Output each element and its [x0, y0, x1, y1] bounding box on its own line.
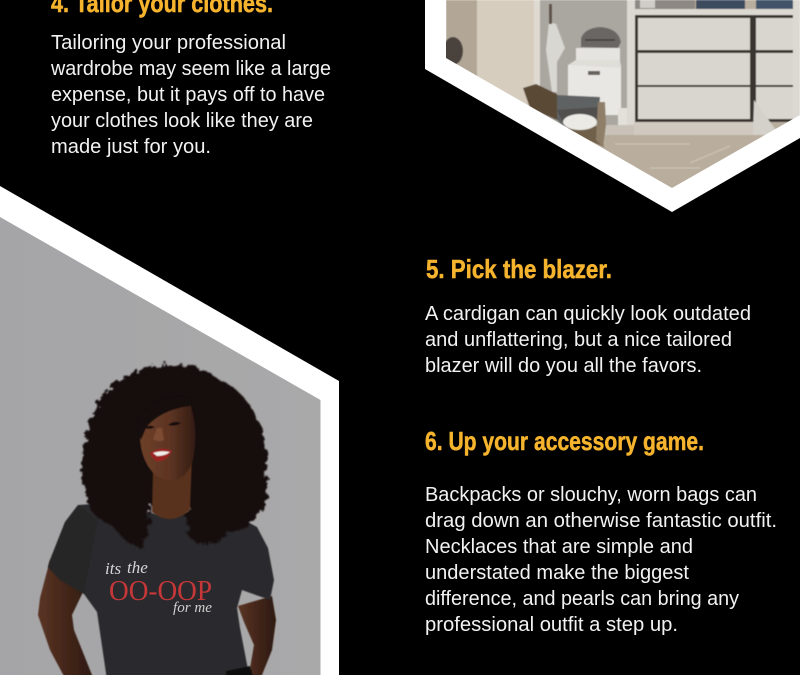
frame — [627, 0, 635, 135]
leaning panel — [753, 100, 776, 138]
text block: tip 5 — [425, 303, 751, 377]
hair — [82, 364, 268, 546]
text block: tip 4: your clothes look like they are — [51, 110, 313, 132]
face — [140, 405, 196, 478]
nose — [153, 428, 164, 441]
print: OO-OOP: OO-OOP — [109, 575, 212, 607]
text block: tip 6: understated make the biggest — [425, 562, 689, 584]
text block: tip 6: difference, and pearls can bring any — [425, 588, 739, 610]
text block: tip 4 — [50, 32, 331, 158]
lips — [150, 449, 172, 461]
text block: tip 6: Backpacks or slouchy, worn bags can — [425, 484, 757, 506]
wicker item — [446, 36, 464, 64]
basket — [523, 84, 557, 120]
hair fringe — [140, 403, 191, 440]
storage boxes — [576, 47, 620, 60]
text block: tip 4: expense, but it pays off to have — [51, 84, 325, 106]
panel: woman photo — [0, 186, 339, 675]
shirt print — [105, 558, 212, 616]
text block: tip 5: and unflattering, but a nice tailored — [425, 329, 732, 351]
text block: tip 5: A cardigan can quickly look outdated — [425, 303, 751, 325]
text block: tip 4: wardrobe may seem like a large — [50, 58, 331, 80]
text block: tip 6: drag down an otherwise fantastic outfit. — [425, 510, 777, 532]
text block: tip 4: Tailoring your professional — [51, 32, 286, 54]
t-shirt — [48, 503, 274, 675]
heading: tip 6: 6. Up your accessory game. — [425, 426, 704, 456]
arms — [38, 560, 276, 675]
print: its the: its — [105, 559, 121, 578]
folded blanket — [581, 27, 621, 48]
floor — [754, 134, 765, 138]
text block: tip 5: blazer will do you all the favors. — [425, 355, 702, 377]
heading: tip 5: 5. Pick the blazer. — [426, 254, 612, 284]
white frame — [0, 186, 339, 675]
closet scene — [443, 0, 800, 195]
woman figure — [38, 364, 276, 675]
neck — [152, 455, 192, 519]
plinth — [634, 122, 754, 135]
shirt print: the — [127, 558, 148, 577]
waistband — [226, 666, 254, 675]
eyes — [145, 426, 155, 429]
print: for me: for me — [173, 600, 212, 616]
hanging towel — [546, 22, 565, 92]
panel: closet photo hexagon — [425, 0, 800, 212]
text block: tip 6: Necklaces that are simple and — [425, 536, 693, 558]
text block: tip 4: made just for you. — [51, 136, 211, 158]
text block: tip 6 — [425, 484, 777, 636]
photo background — [0, 217, 320, 675]
white hexagon frame — [425, 0, 800, 212]
drawers — [635, 15, 793, 122]
text block: tip 6: professional outfit a step up. — [425, 614, 678, 636]
shelf contents — [635, 0, 695, 9]
